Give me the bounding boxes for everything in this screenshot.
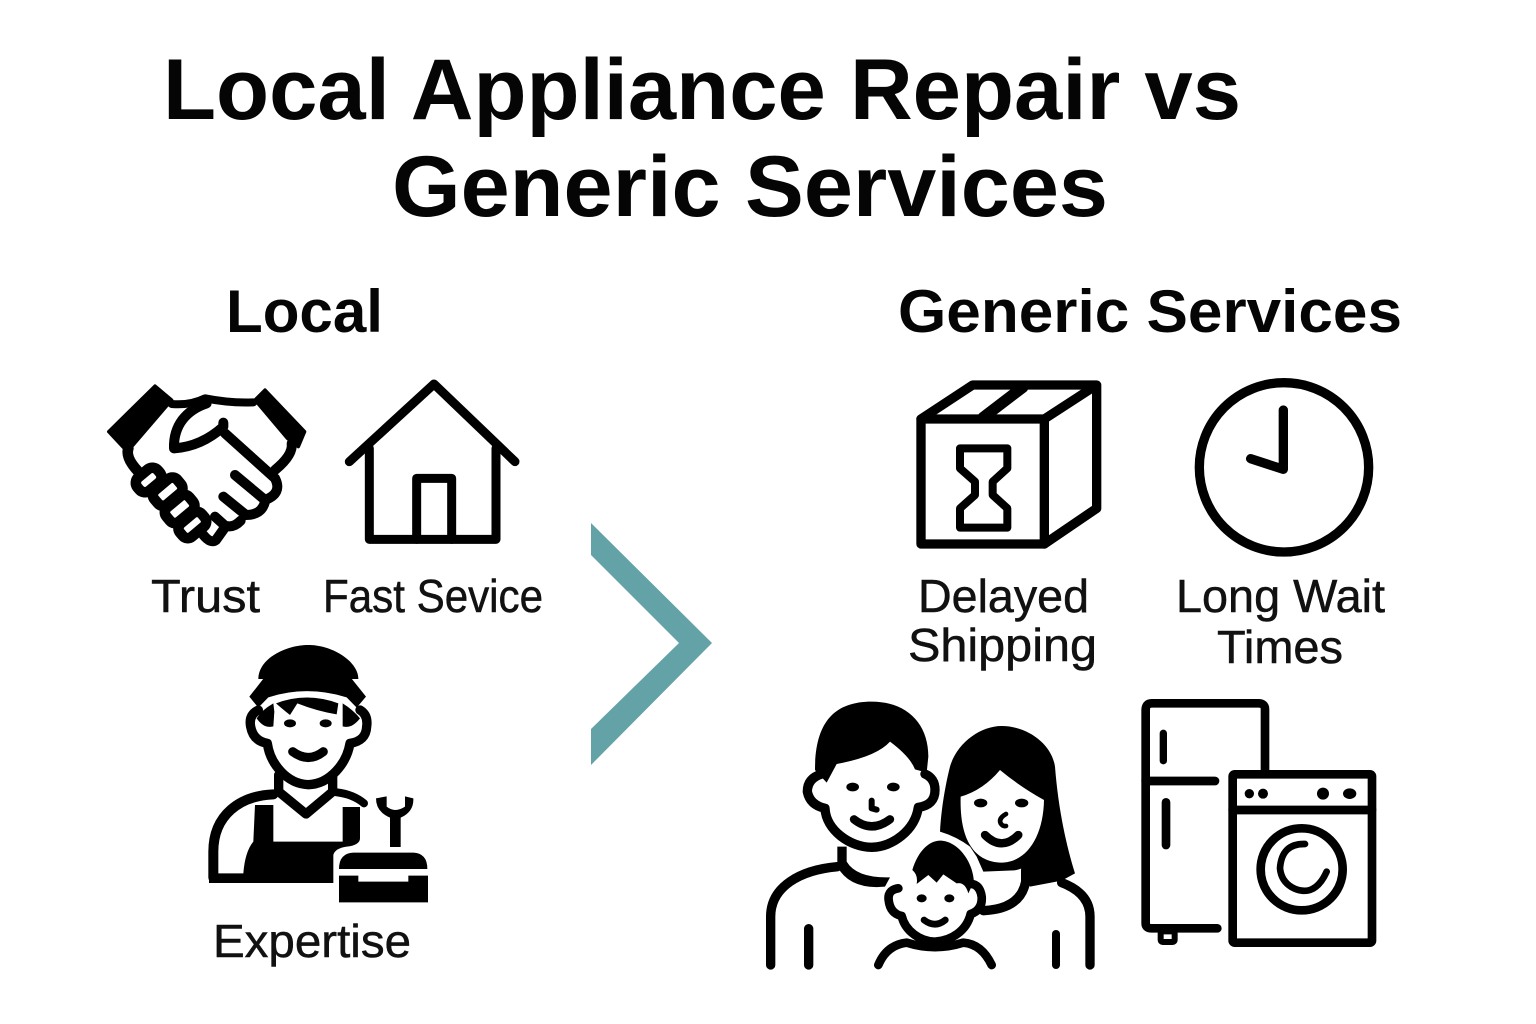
icon: clock	[1199, 383, 1369, 552]
label: Fast Sevice: Fast Sevice	[323, 570, 543, 622]
label: Long Wait Times: Times	[1217, 621, 1343, 673]
title	[163, 42, 1241, 235]
label: Delayed Shipping	[908, 570, 1097, 671]
icon: fridge and washing machine	[1146, 703, 1372, 943]
label: Long Wait Times: Long Wait	[1176, 570, 1385, 622]
icon: house	[349, 384, 515, 539]
icon: technician with toolbox	[209, 645, 428, 902]
title: Local Appliance Repair vs	[163, 42, 1241, 138]
heading: Generic Services: Generic Services	[898, 278, 1402, 345]
arrow: teal chevron	[591, 523, 712, 765]
label: Expertise: Expertise	[213, 915, 411, 967]
label: Delayed Shipping: Delayed	[918, 570, 1089, 622]
heading: Local: Local	[226, 278, 383, 345]
icon: box with hourglass	[921, 385, 1097, 544]
label: Long Wait Times	[1176, 570, 1385, 673]
label: Delayed Shipping: Shipping	[908, 619, 1097, 671]
label: Trust: Trust	[151, 570, 260, 622]
icon: handshake	[109, 386, 305, 541]
title: Generic Services	[392, 139, 1108, 235]
icon: family	[771, 702, 1090, 965]
